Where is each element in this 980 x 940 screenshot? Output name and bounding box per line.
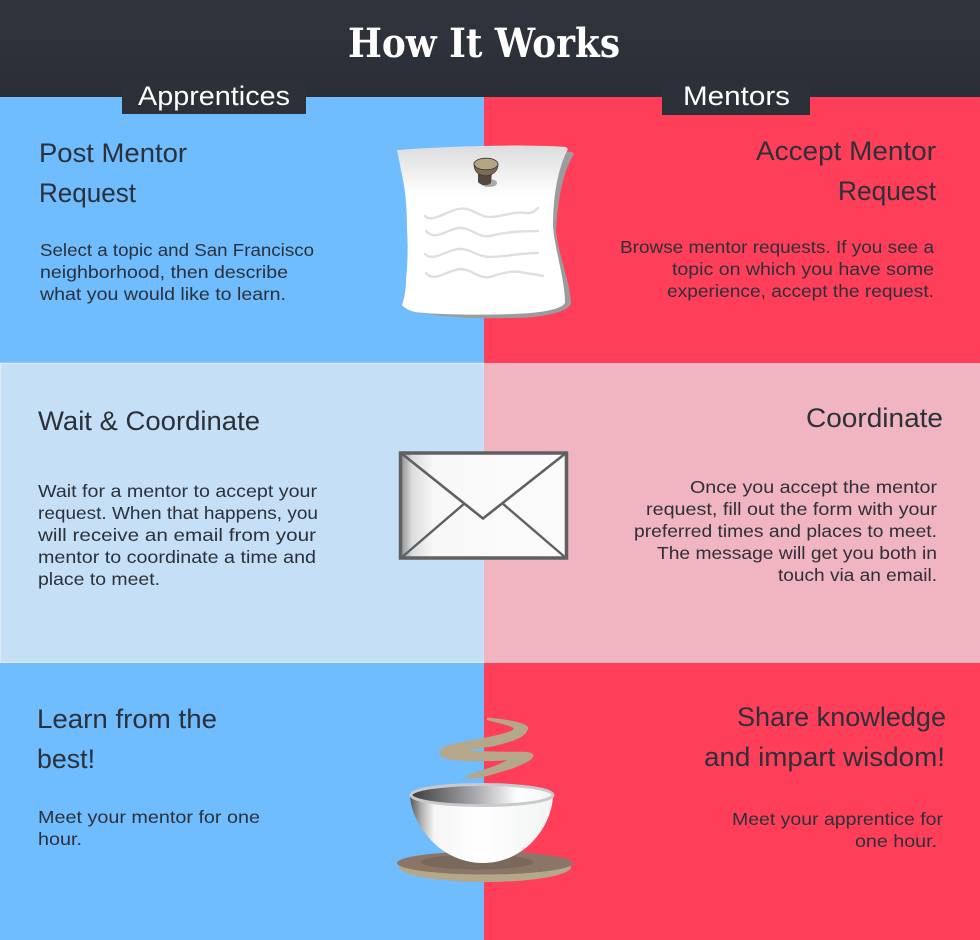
- panel: apprentices step 2 background: [0, 364, 484, 662]
- apprentice step 1 text: neighborhood, then describe: [40, 262, 288, 282]
- mentor step 1 text: experience, accept the request.: [667, 281, 934, 301]
- icon detail: note scribbles: [425, 208, 543, 277]
- panel: mentors step 3 background: [484, 663, 980, 940]
- apprentice step 2 text: request. When that happens, you: [38, 503, 318, 523]
- mentor step 3 heading: [704, 702, 946, 772]
- apprentice step 3 heading: Learn from the: [37, 704, 217, 734]
- mentor step 2 heading: Coordinate: [806, 403, 943, 433]
- mentor step 3 heading: Share knowledge: [737, 702, 946, 732]
- panel: mentors step 1 background: [484, 97, 980, 363]
- icon detail: steam: [441, 719, 532, 777]
- apprentice step 2 text: mentor to coordinate a time and: [38, 547, 316, 567]
- panel: mentors step 2 background: [484, 363, 980, 663]
- apprentice step 1 heading: [39, 138, 187, 208]
- mentor step 2 text: The message will get you both in: [657, 543, 937, 563]
- column label: Mentors: Mentors: [683, 81, 790, 111]
- apprentice step 1 text: what you would like to learn.: [39, 284, 286, 304]
- icon: coffee cup: [397, 719, 573, 882]
- apprentice step 2 text: place to meet.: [38, 569, 160, 589]
- mentor step 1 heading: Accept Mentor: [756, 136, 936, 166]
- mentor step 1 text: [620, 237, 934, 301]
- column label: Apprentices: [122, 80, 306, 114]
- column label: Mentors: [662, 80, 810, 115]
- icon detail: push pin: [474, 158, 498, 187]
- icon detail: bowl: [410, 796, 553, 863]
- mentor step 2 text: preferred times and places to meet.: [634, 521, 937, 541]
- apprentice step 3 heading: best!: [37, 744, 95, 774]
- title: How It Works: [348, 20, 620, 67]
- panel: apprentices step 3 background: [0, 663, 484, 940]
- icon detail: saucer: [397, 852, 573, 882]
- icon: envelope: [400, 453, 566, 558]
- icon detail: bowl rim: [411, 784, 553, 806]
- apprentice step 1 heading: Post Mentor: [39, 138, 187, 168]
- apprentice step 3 text: hour.: [38, 829, 82, 849]
- mentor step 1 heading: [756, 136, 937, 206]
- mentor step 3 text: Meet your apprentice for: [732, 809, 943, 829]
- mentor step 1 text: Browse mentor requests. If you see a: [620, 237, 934, 257]
- apprentice step 2 heading: Wait & Coordinate: [38, 406, 260, 436]
- apprentice step 2 text: will receive an email from your: [37, 525, 316, 545]
- mentor step 2 text: touch via an email.: [778, 565, 937, 585]
- apprentice step 2 text: Wait for a mentor to accept your: [38, 481, 317, 501]
- mentor step 3 heading: and impart wisdom!: [704, 742, 945, 772]
- header band: [0, 0, 980, 97]
- apprentice step 3 heading: [37, 704, 217, 774]
- mentor step 2 text: Once you accept the mentor: [690, 477, 937, 497]
- icon: pinned note: [397, 146, 574, 318]
- apprentice step 1 text: Select a topic and San Francisco: [40, 240, 314, 260]
- apprentice step 1 heading: Request: [39, 178, 137, 208]
- apprentice step 3 text: Meet your mentor for one: [38, 807, 260, 827]
- mentor step 2 text: [634, 477, 937, 585]
- mentor step 1 text: topic on which you have some: [672, 259, 934, 279]
- column label: Apprentices: Apprentices: [138, 81, 290, 111]
- apprentice step 2 text: [37, 481, 318, 589]
- mentor step 1 heading: Request: [838, 176, 937, 206]
- mentor step 3 text: one hour.: [855, 831, 937, 851]
- mentor step 3 text: [732, 809, 943, 851]
- apprentice step 1 text: [39, 240, 314, 304]
- panel: apprentices step 1 background: [0, 97, 484, 363]
- mentor step 2 text: request, fill out the form with your: [646, 499, 937, 519]
- apprentice step 3 text: [38, 807, 260, 849]
